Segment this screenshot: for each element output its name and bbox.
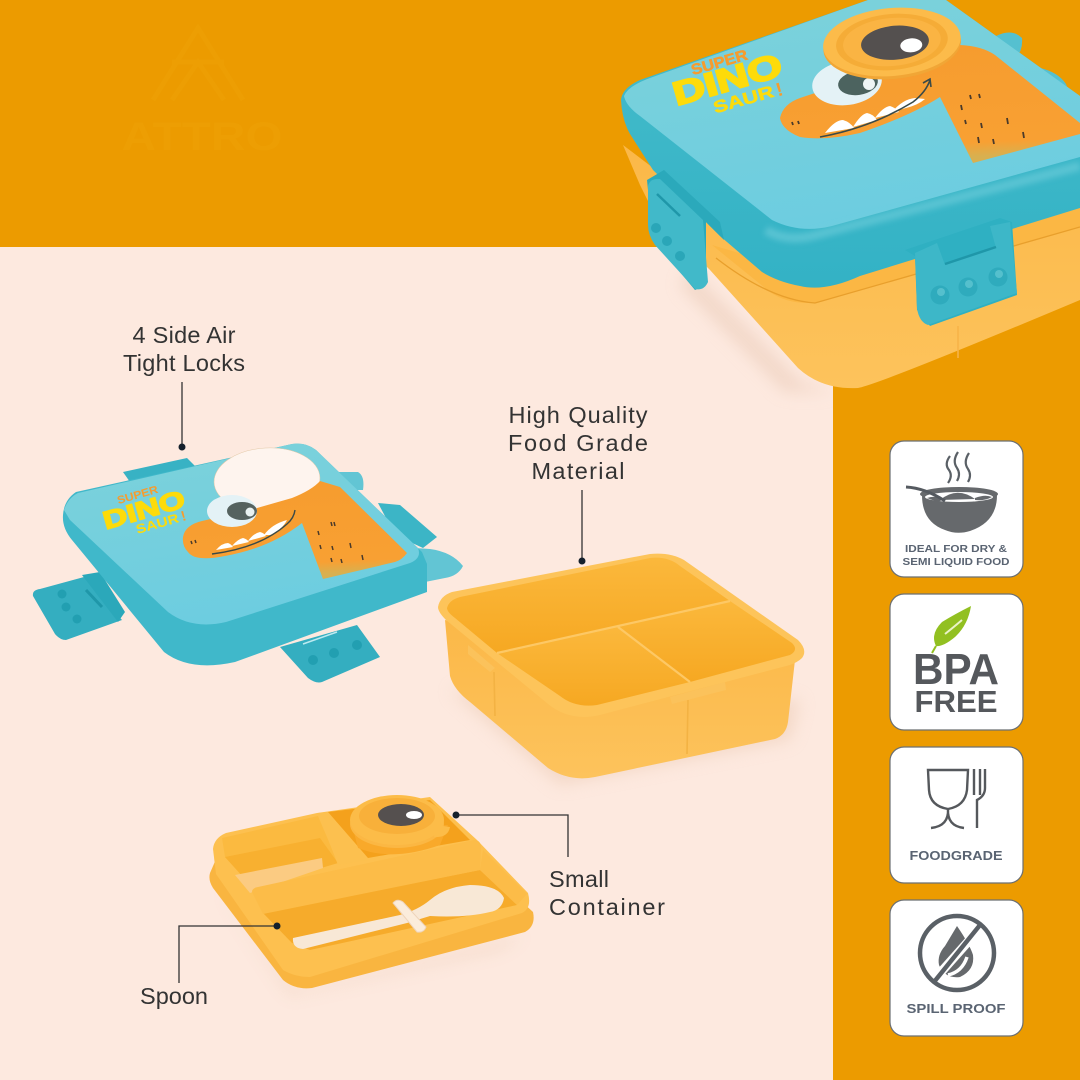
tray upper body [213,797,529,977]
eye ring container [820,2,964,85]
front clip [905,218,1017,326]
box lid [621,0,1080,288]
tray shadow [215,885,525,996]
brand text: DINO [668,46,786,113]
box base rim [712,205,1080,303]
lid fins [337,472,463,585]
label: 4 side air tight locks: 4 Side Air [132,322,236,348]
label: high quality material: Food Grade [508,430,648,456]
dino teeth [825,98,925,133]
badge caption: FOODGRADE [910,849,1002,863]
tray lower compartment [263,870,517,950]
box inner compartments [447,558,795,706]
tray divider [318,812,367,865]
label: spoon [140,922,280,1009]
lid brand text [98,478,191,545]
badge: ideal for dry and semi liquid food: SEMI LIQUID FOOD [902,556,1010,568]
icon: glass and fork [928,769,985,828]
label: high quality material: High Quality [508,402,648,428]
bpa text: BPA [913,645,999,694]
box latch tabs [468,645,726,704]
label: high quality material: Material [532,458,624,484]
label: high quality material [508,402,648,564]
watermark logo [122,28,282,159]
lid brand text: ! [179,507,188,524]
product: open lid [33,444,463,682]
dino neck spots [792,94,1024,144]
spoon [293,885,504,949]
icon: steaming bowl [906,452,998,533]
product: divided box base [438,554,804,785]
tray lower rim [209,850,534,988]
lid surface [64,444,419,624]
icon: crossed drop [920,916,994,990]
lid body [63,444,427,665]
icon: leaf [932,606,971,653]
label: spoon: Spoon [140,983,208,1009]
box shadow [682,278,810,394]
label: small container: Container [549,894,665,920]
lid front highlight [766,166,1080,238]
brand text [666,38,791,129]
lid top surface [624,0,1080,229]
dino mouth line [820,79,931,137]
box base [623,145,1080,388]
product: tray with container and spoon [209,795,534,996]
brand text: SUPER [689,47,750,79]
lid hole [212,445,322,515]
badge caption: SPILL PROOF [906,1001,1006,1016]
lid brand text: DINO [100,485,188,535]
brand text: ! [774,79,785,101]
brand text: SAUR [711,82,776,117]
badge: foodgrade [890,747,1023,883]
small container [350,795,450,854]
cream background panel [0,247,833,1080]
label: 4 side air tight locks [123,322,245,450]
tray left compartment [222,816,338,888]
watermark logo: ATTRO [122,115,282,159]
lid tab left [33,572,125,640]
tray long divider [252,840,481,914]
label: 4 side air tight locks: Tight Locks [123,350,245,376]
box rim [438,554,804,717]
lid brand text: SAUR [134,510,181,537]
lid tab bottom [280,625,380,682]
free text: FREE [914,684,998,719]
label: small container [452,812,665,920]
lid tab right [378,503,437,548]
tray container compartment [328,800,470,858]
lid tab top [123,458,195,482]
badge: spill proof [890,900,1023,1036]
lid dino artwork [183,481,407,579]
side clip [647,170,724,290]
box outer body [445,620,795,778]
badge: bpa free [890,594,1023,730]
badge: ideal for dry and semi liquid food [890,441,1023,577]
dino eye [809,56,885,110]
dino fins [996,32,1068,102]
label: small container: Small [549,866,609,892]
box shadow [450,690,800,785]
badge caption: IDEAL FOR DRY & [905,543,1007,555]
lid brand text: SUPER [116,484,160,507]
dino artwork [780,45,1080,163]
product: closed lunch box [621,0,1080,392]
